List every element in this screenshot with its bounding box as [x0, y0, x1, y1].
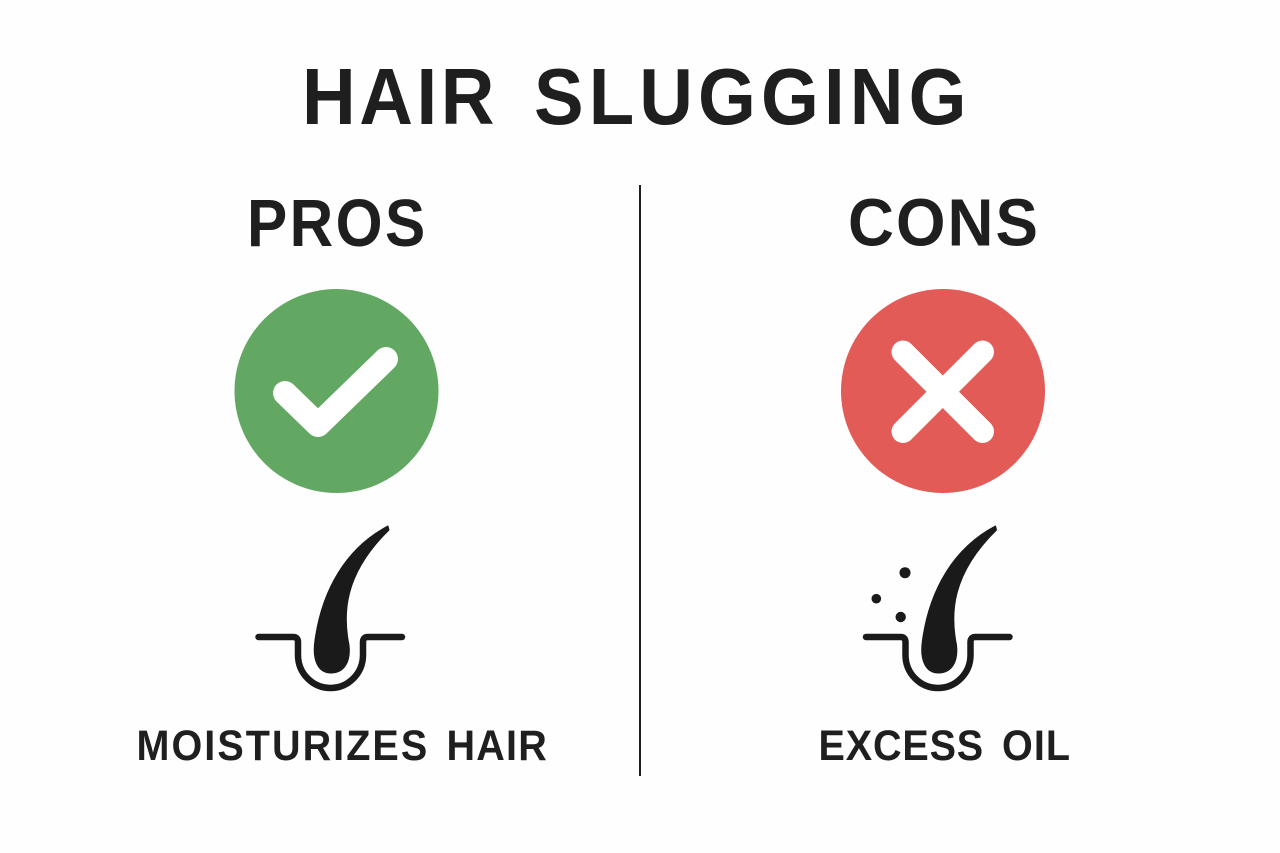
- label: moisturizes hair: MOISTURIZES: [136, 721, 427, 769]
- title: HAIR: [302, 53, 495, 142]
- panel: cons: [818, 185, 1070, 769]
- icon: hair follicle: [258, 526, 402, 688]
- panel: pros: [136, 185, 547, 769]
- label: moisturizes hair: HAIR: [446, 721, 547, 769]
- heading: cons: CONS: [848, 185, 1038, 260]
- icon: red cross badge: [841, 289, 1045, 493]
- icon: green check badge: [234, 289, 438, 493]
- title: [302, 53, 966, 142]
- label: excess oil: [818, 721, 1070, 769]
- label: excess oil: OIL: [1002, 721, 1070, 769]
- label: excess oil: EXCESS: [818, 721, 983, 769]
- heading: pros: PROS: [247, 185, 425, 261]
- icon: hair follicle with oil droplets: [866, 526, 1010, 688]
- title: SLUGGING: [534, 53, 966, 142]
- divider between pros and cons: [639, 185, 641, 776]
